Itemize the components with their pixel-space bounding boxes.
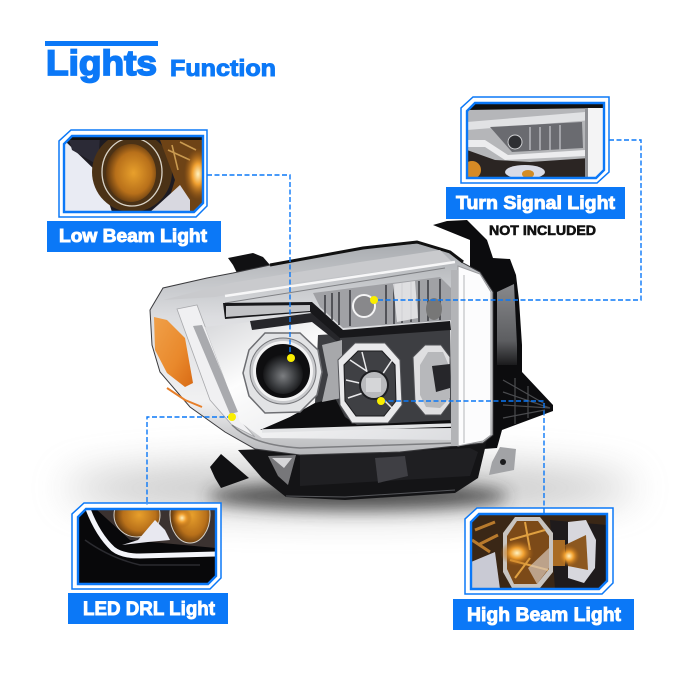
low beam photo [65, 137, 202, 211]
amber strip [167, 388, 202, 407]
lower chrome trim [262, 425, 452, 431]
chrome lens body [150, 243, 493, 455]
chrome between lamps [322, 340, 342, 402]
panel: high beam [465, 508, 613, 594]
turn signal housing [313, 277, 453, 328]
turn signal frame [461, 97, 609, 183]
white inner panel [205, 313, 452, 440]
high beam reflector [338, 343, 402, 423]
low beam frame [59, 130, 207, 217]
high beam photo [471, 514, 608, 590]
callout line: turn signal [374, 140, 641, 300]
upper chrome bands [163, 250, 452, 300]
third reflector [413, 345, 450, 415]
top dark edge [270, 242, 463, 265]
label: high beam [453, 599, 634, 630]
amber side marker [154, 317, 193, 387]
rear black bracket [433, 220, 553, 450]
panel: low beam [59, 130, 212, 217]
label: turn signal: Turn Signal Light [456, 193, 615, 213]
label: LED DRL [68, 593, 228, 624]
LED DRL frame [72, 503, 221, 589]
label: LED DRL: LED DRL Light [83, 598, 215, 620]
label: turn signal [446, 187, 625, 219]
bulb ring [353, 295, 375, 317]
not included note: NOT INCLUDED [489, 223, 596, 238]
left lower bracket [210, 454, 249, 488]
title [45, 41, 276, 83]
bracket grey face [497, 284, 517, 365]
callout line: high beam [381, 401, 544, 515]
chrome left blade [177, 305, 255, 437]
silver blade strip [193, 325, 238, 414]
upper dark shelf [250, 313, 340, 344]
title: Lights [46, 44, 157, 83]
right white band [451, 266, 491, 446]
panel: turn signal [461, 97, 609, 183]
callout line: LED DRL [147, 417, 232, 505]
low beam projector [243, 333, 322, 413]
ground shadow [65, 466, 635, 510]
callout line: low beam [207, 175, 290, 358]
dark lower cavity [260, 398, 452, 430]
label: low beam: Low Beam Light [59, 226, 207, 246]
metal mounting tab [489, 447, 516, 475]
bracket ribs [503, 378, 550, 424]
lower dark housing [238, 440, 487, 500]
top clip tab [228, 253, 270, 275]
label: high beam: High Beam Light [467, 605, 622, 626]
title: Function [170, 55, 276, 81]
turn signal photo [463, 103, 605, 179]
marker dots [228, 296, 385, 421]
LED DRL photo [79, 510, 215, 583]
headlight assembly [150, 220, 553, 500]
black bar [223, 302, 451, 338]
lower housing reflection [268, 448, 478, 497]
panel: LED DRL [71, 502, 222, 590]
inner dark lamp cavity [262, 328, 452, 430]
high beam frame [465, 508, 613, 594]
label: low beam [47, 221, 221, 252]
